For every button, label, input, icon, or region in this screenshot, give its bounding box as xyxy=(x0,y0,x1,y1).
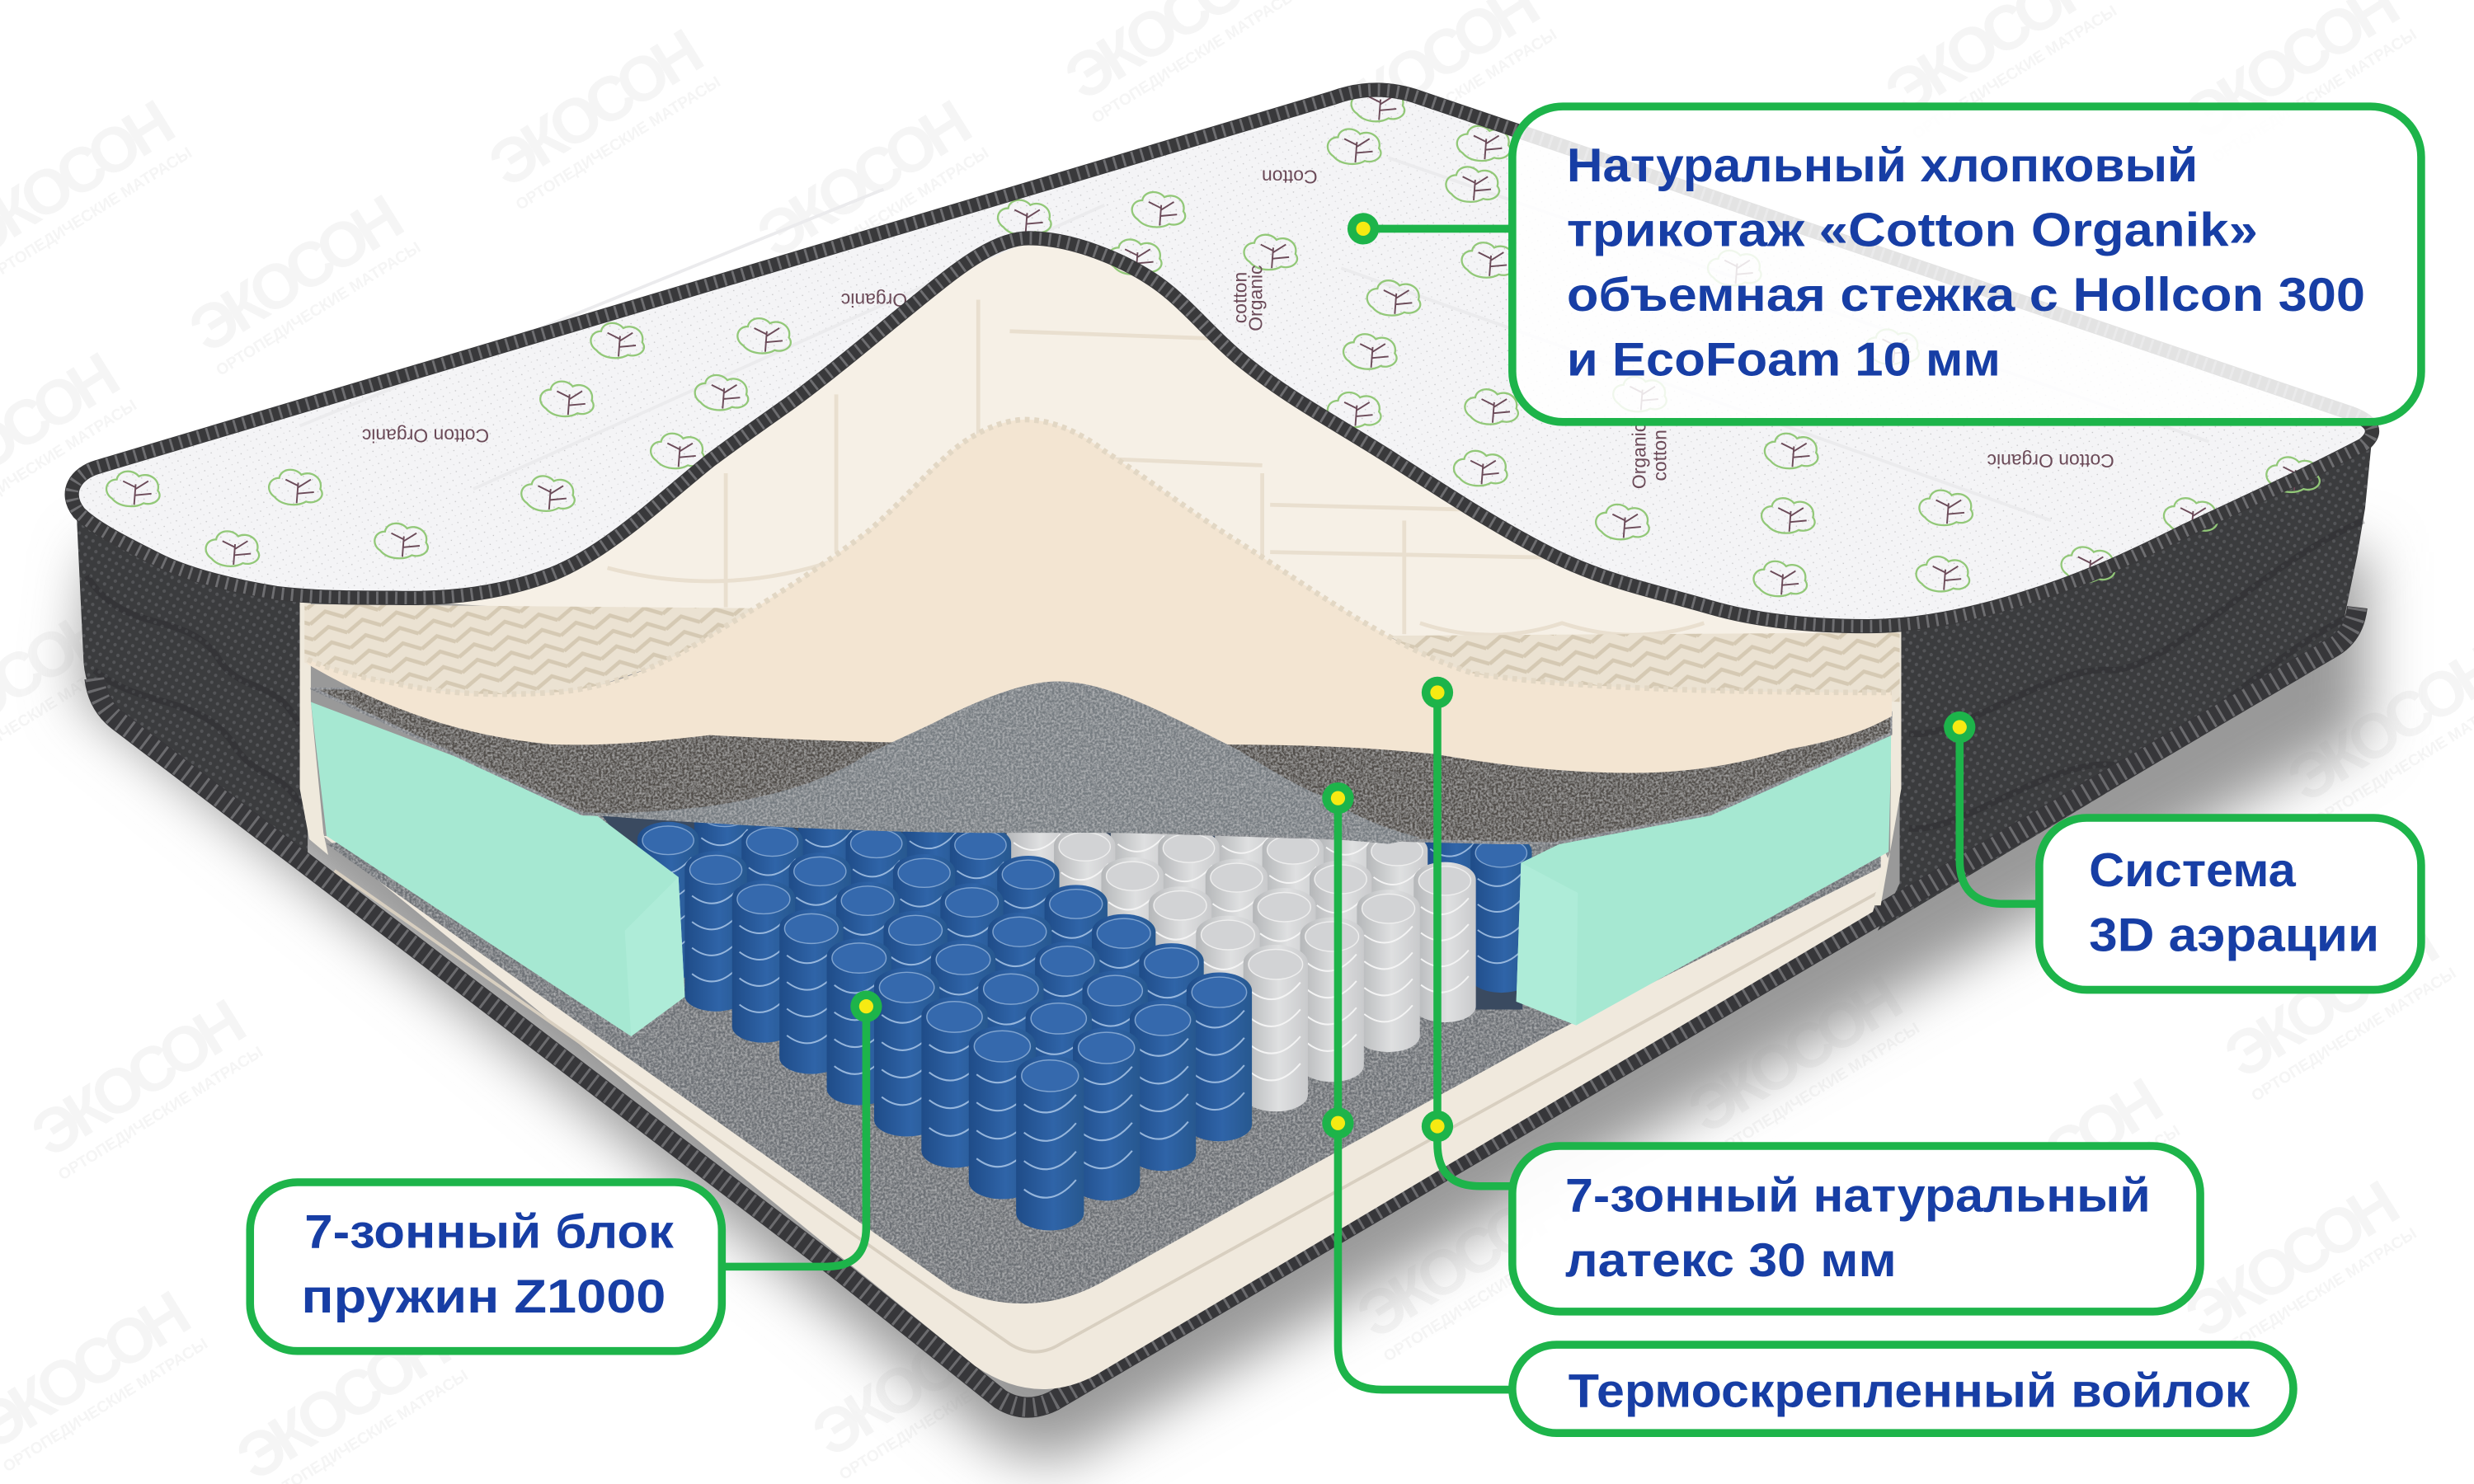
watermarks: ОРТОПЕДИЧЕСКИЕ МАТРАСЫ xyxy=(214,239,424,380)
spring block xyxy=(637,794,1532,1230)
watermarks: ОРТОПЕДИЧЕСКИЕ МАТРАСЫ xyxy=(2209,1225,2420,1365)
leader line xyxy=(1437,693,1512,1186)
watermarks: ОРТОПЕДИЧЕСКИЕ МАТРАСЫ xyxy=(0,1336,211,1476)
watermarks: ЭКОСОН xyxy=(477,16,715,201)
fabric piping xyxy=(72,90,2372,627)
marker dots xyxy=(1322,782,1354,1139)
bottom cream layers xyxy=(323,836,1888,1389)
watermarks: ЭКОСОН xyxy=(1677,962,1914,1147)
marker dot xyxy=(850,991,882,1022)
watermarks: ЭКОСОН xyxy=(745,87,984,272)
watermarks: ЭКОСОН xyxy=(177,181,416,366)
side ripple shading xyxy=(87,520,2363,829)
cotton organic logos: Cotton xyxy=(1262,167,1318,188)
callout text: трикотаж «Cotton Organik» xyxy=(1567,204,2258,256)
callout: cotton fabric xyxy=(1348,106,2421,422)
callout box xyxy=(1512,106,2421,422)
callout text xyxy=(1567,139,2365,386)
cotton organic logos xyxy=(362,167,2114,489)
watermarks: ОРТОПЕДИЧЕСКИЕ МАТРАСЫ xyxy=(1973,1122,2183,1263)
callout box xyxy=(1512,1345,2293,1433)
quilted underside xyxy=(363,221,1900,637)
callout text: Система xyxy=(2089,844,2297,897)
watermarks: ОРТОПЕДИЧЕСКИЕ МАТРАСЫ xyxy=(1909,2,2120,143)
felt floor xyxy=(327,805,1881,1303)
marker dot xyxy=(1348,213,1379,245)
watermarks: ОРТОПЕДИЧЕСКИЕ МАТРАСЫ xyxy=(1712,1020,1923,1161)
watermarks: ЭКОСОН xyxy=(801,1286,1039,1471)
callout text: и EcoFoam 10 мм xyxy=(1567,333,2001,386)
watermarks: ОРТОПЕДИЧЕСКИЕ МАТРАСЫ xyxy=(2249,965,2459,1106)
callout text: Натуральный хлопковый xyxy=(1567,139,2198,192)
drop shadow xyxy=(79,552,2367,1459)
cotton organic logos: cotton xyxy=(1229,272,1250,323)
watermarks: ЭКОСОН xyxy=(2213,907,2451,1092)
callout box xyxy=(250,1182,722,1351)
callout text: латекс 30 мм xyxy=(1565,1234,1897,1287)
fabric quilt lines xyxy=(300,157,2209,520)
left foam block xyxy=(311,702,684,1036)
callout text xyxy=(2089,844,2379,962)
watermarks: ЭКОСОН xyxy=(1345,1167,1583,1352)
callout text: пружин Z1000 xyxy=(301,1270,666,1323)
callout text: 7-зонный блок xyxy=(304,1205,674,1258)
watermarks: ОРТОПЕДИЧЕСКИЕ МАТРАСЫ xyxy=(1380,1225,1592,1365)
callout: felt xyxy=(1322,782,2293,1433)
callout text: 3D аэрации xyxy=(2089,909,2379,962)
latex layer xyxy=(308,420,1892,773)
watermarks: ЭКОСОН xyxy=(1937,1065,2175,1250)
watermarks: ОРТОПЕДИЧЕСКИЕ МАТРАСЫ xyxy=(513,73,724,214)
watermarks: ОРТОПЕДИЧЕСКИЕ МАТРАСЫ xyxy=(2209,26,2420,167)
callout text: объемная стежка с Hollcon 300 xyxy=(1567,269,2365,322)
callout text xyxy=(301,1205,674,1323)
leader line xyxy=(1959,727,2039,904)
back felt surface xyxy=(311,688,1892,844)
callout: 3D aeration xyxy=(1944,711,2421,990)
callout text xyxy=(1565,1169,2151,1287)
marker dots xyxy=(1422,677,1453,1142)
watermarks: ОРТОПЕДИЧЕСКИЕ МАТРАСЫ xyxy=(781,144,992,285)
leader line xyxy=(1338,798,1512,1390)
top cover fabric xyxy=(72,87,2372,627)
watermarks: ОРТОПЕДИЧЕСКИЕ МАТРАСЫ xyxy=(55,1044,266,1184)
leader line xyxy=(1363,227,1512,231)
ribbed latex surface xyxy=(304,604,1900,702)
callout text: Термоскрепленный войлок xyxy=(1569,1365,2251,1418)
cotton motifs xyxy=(106,87,2320,596)
cover edge strips xyxy=(300,599,1901,905)
watermarks: ЭКОСОН xyxy=(2174,1167,2411,1352)
cotton organic logos: Organic xyxy=(841,289,907,311)
cotton organic logos: cotton xyxy=(1649,430,1670,481)
right mesh side xyxy=(1878,427,2373,931)
callout text: 7-зонный натуральный xyxy=(1565,1169,2151,1222)
callout: latex xyxy=(1422,677,2200,1312)
marker dot xyxy=(1944,711,1975,743)
callout box xyxy=(1512,1146,2200,1312)
cotton organic logos: Organic xyxy=(1629,423,1650,489)
leader line xyxy=(722,1007,866,1266)
lifted felt hump xyxy=(582,682,1420,844)
callout box xyxy=(2039,818,2421,990)
bottom piping xyxy=(95,608,2357,1407)
watermarks: ОРТОПЕДИЧЕСКИЕ МАТРАСЫ xyxy=(836,1343,1047,1484)
cotton organic logos: Organic xyxy=(1245,265,1267,331)
right foam block xyxy=(1517,726,1892,1026)
watermarks: ЭКОСОН xyxy=(20,986,257,1171)
dark space behind springs xyxy=(600,812,1522,1009)
watermarks: ОРТОПЕДИЧЕСКИЕ МАТРАСЫ xyxy=(1349,26,1560,167)
callout: spring block xyxy=(250,991,882,1351)
cotton organic logos: Cotton Organic xyxy=(1987,450,2114,472)
cotton organic logos: Cotton Organic xyxy=(362,425,489,446)
left mesh side xyxy=(76,497,308,867)
